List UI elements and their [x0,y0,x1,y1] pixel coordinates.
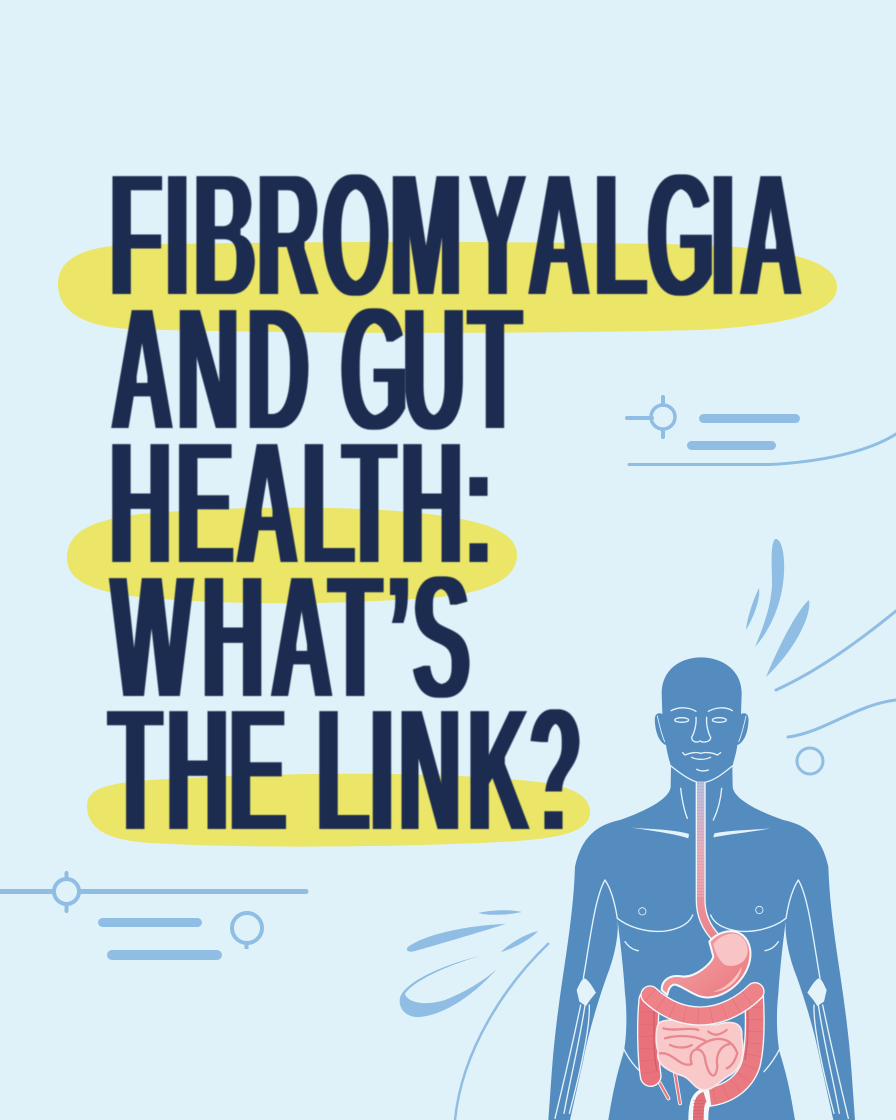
decoration: lower left node and bars [0,873,306,960]
body contour lines [555,716,848,1118]
body silhouette [548,657,855,1120]
gap between left arm and torso [570,918,626,1120]
stomach highlight [713,934,748,992]
human figure [548,657,855,1120]
title: AND GUT [111,268,521,469]
transverse colon [650,992,755,1016]
collarbones [632,828,771,838]
face [671,708,732,771]
yellow highlight: first line [58,242,837,333]
digestive organs [648,931,755,1120]
title: FIBROMYALGIA [110,134,802,335]
appendix tubes [660,1073,680,1103]
stomach [662,931,750,997]
title: WHAT’S [111,536,470,737]
yellow highlight: third line [87,774,590,847]
title [109,134,802,870]
ascending colon [648,1000,657,1076]
small intestine [656,1020,743,1090]
esophagus [701,782,717,938]
wrist highlights [577,978,827,1006]
yellow highlight: second line [67,508,517,603]
gap between right arm and torso [777,918,833,1120]
decoration: swooshes beside torso [400,910,549,1120]
title: HEALTH: [110,402,493,603]
title: THE LINK? [109,669,582,870]
descending colon and rectum [698,995,755,1120]
decoration: upper right node and bars [627,397,896,464]
decoration: swooshes above head [746,539,896,774]
